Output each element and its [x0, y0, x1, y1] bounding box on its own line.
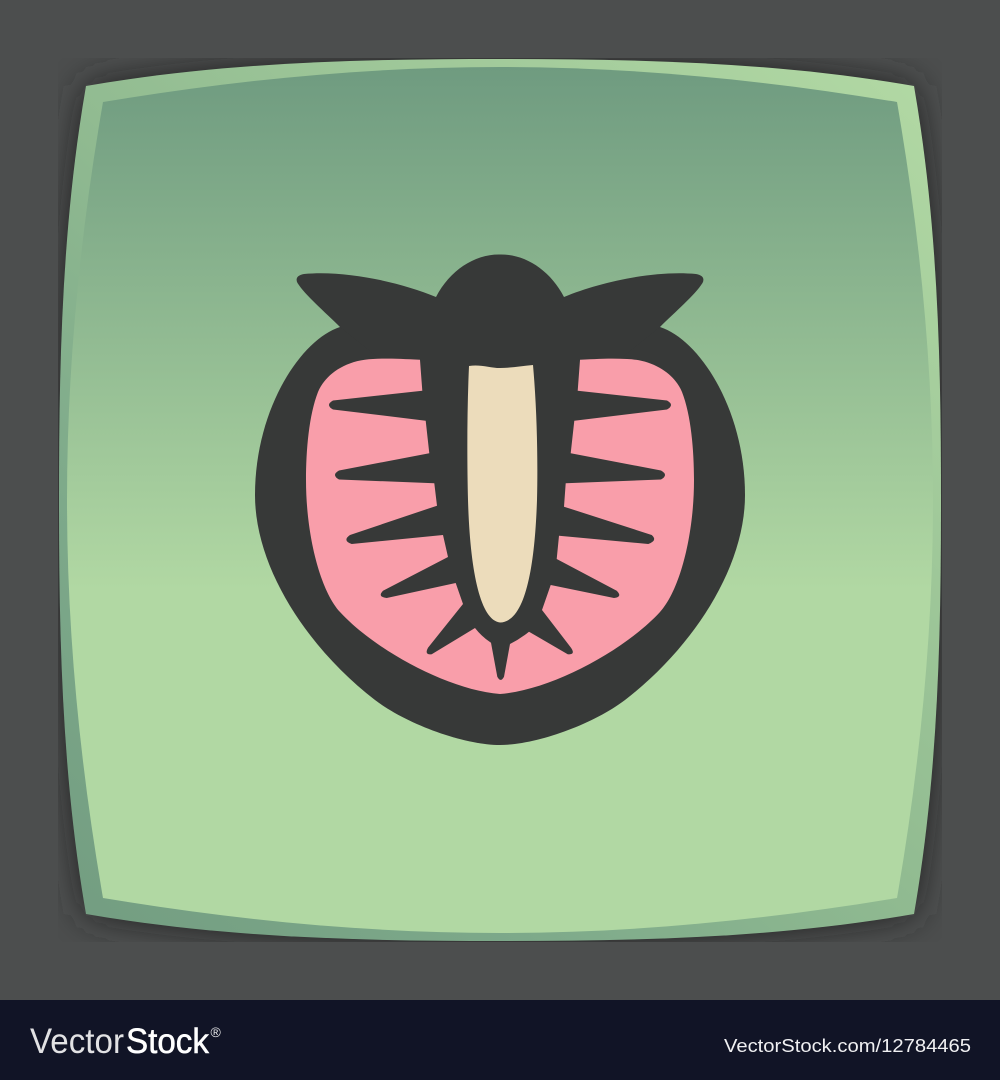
watermark logo text: Vector: [30, 1022, 124, 1061]
plate face: [67, 67, 933, 933]
plate: [59, 59, 941, 941]
icon: halved strawberry: [255, 254, 745, 745]
watermark logo text: ®: [210, 1024, 222, 1040]
watermark logo text: [30, 1022, 222, 1061]
plate shadow: [59, 59, 941, 941]
strawberry flesh: [306, 359, 694, 694]
strawberry leaves: [297, 254, 703, 375]
plate rim: [59, 59, 941, 941]
strawberry core and seed spikes: [329, 345, 671, 680]
strawberry body: [255, 327, 745, 745]
watermark url text: VectorStock.com/12784465: [724, 1036, 971, 1056]
strawberry centre: [467, 365, 537, 622]
watermark logo text: Stock: [126, 1022, 209, 1061]
footer bar: [0, 1000, 1000, 1080]
